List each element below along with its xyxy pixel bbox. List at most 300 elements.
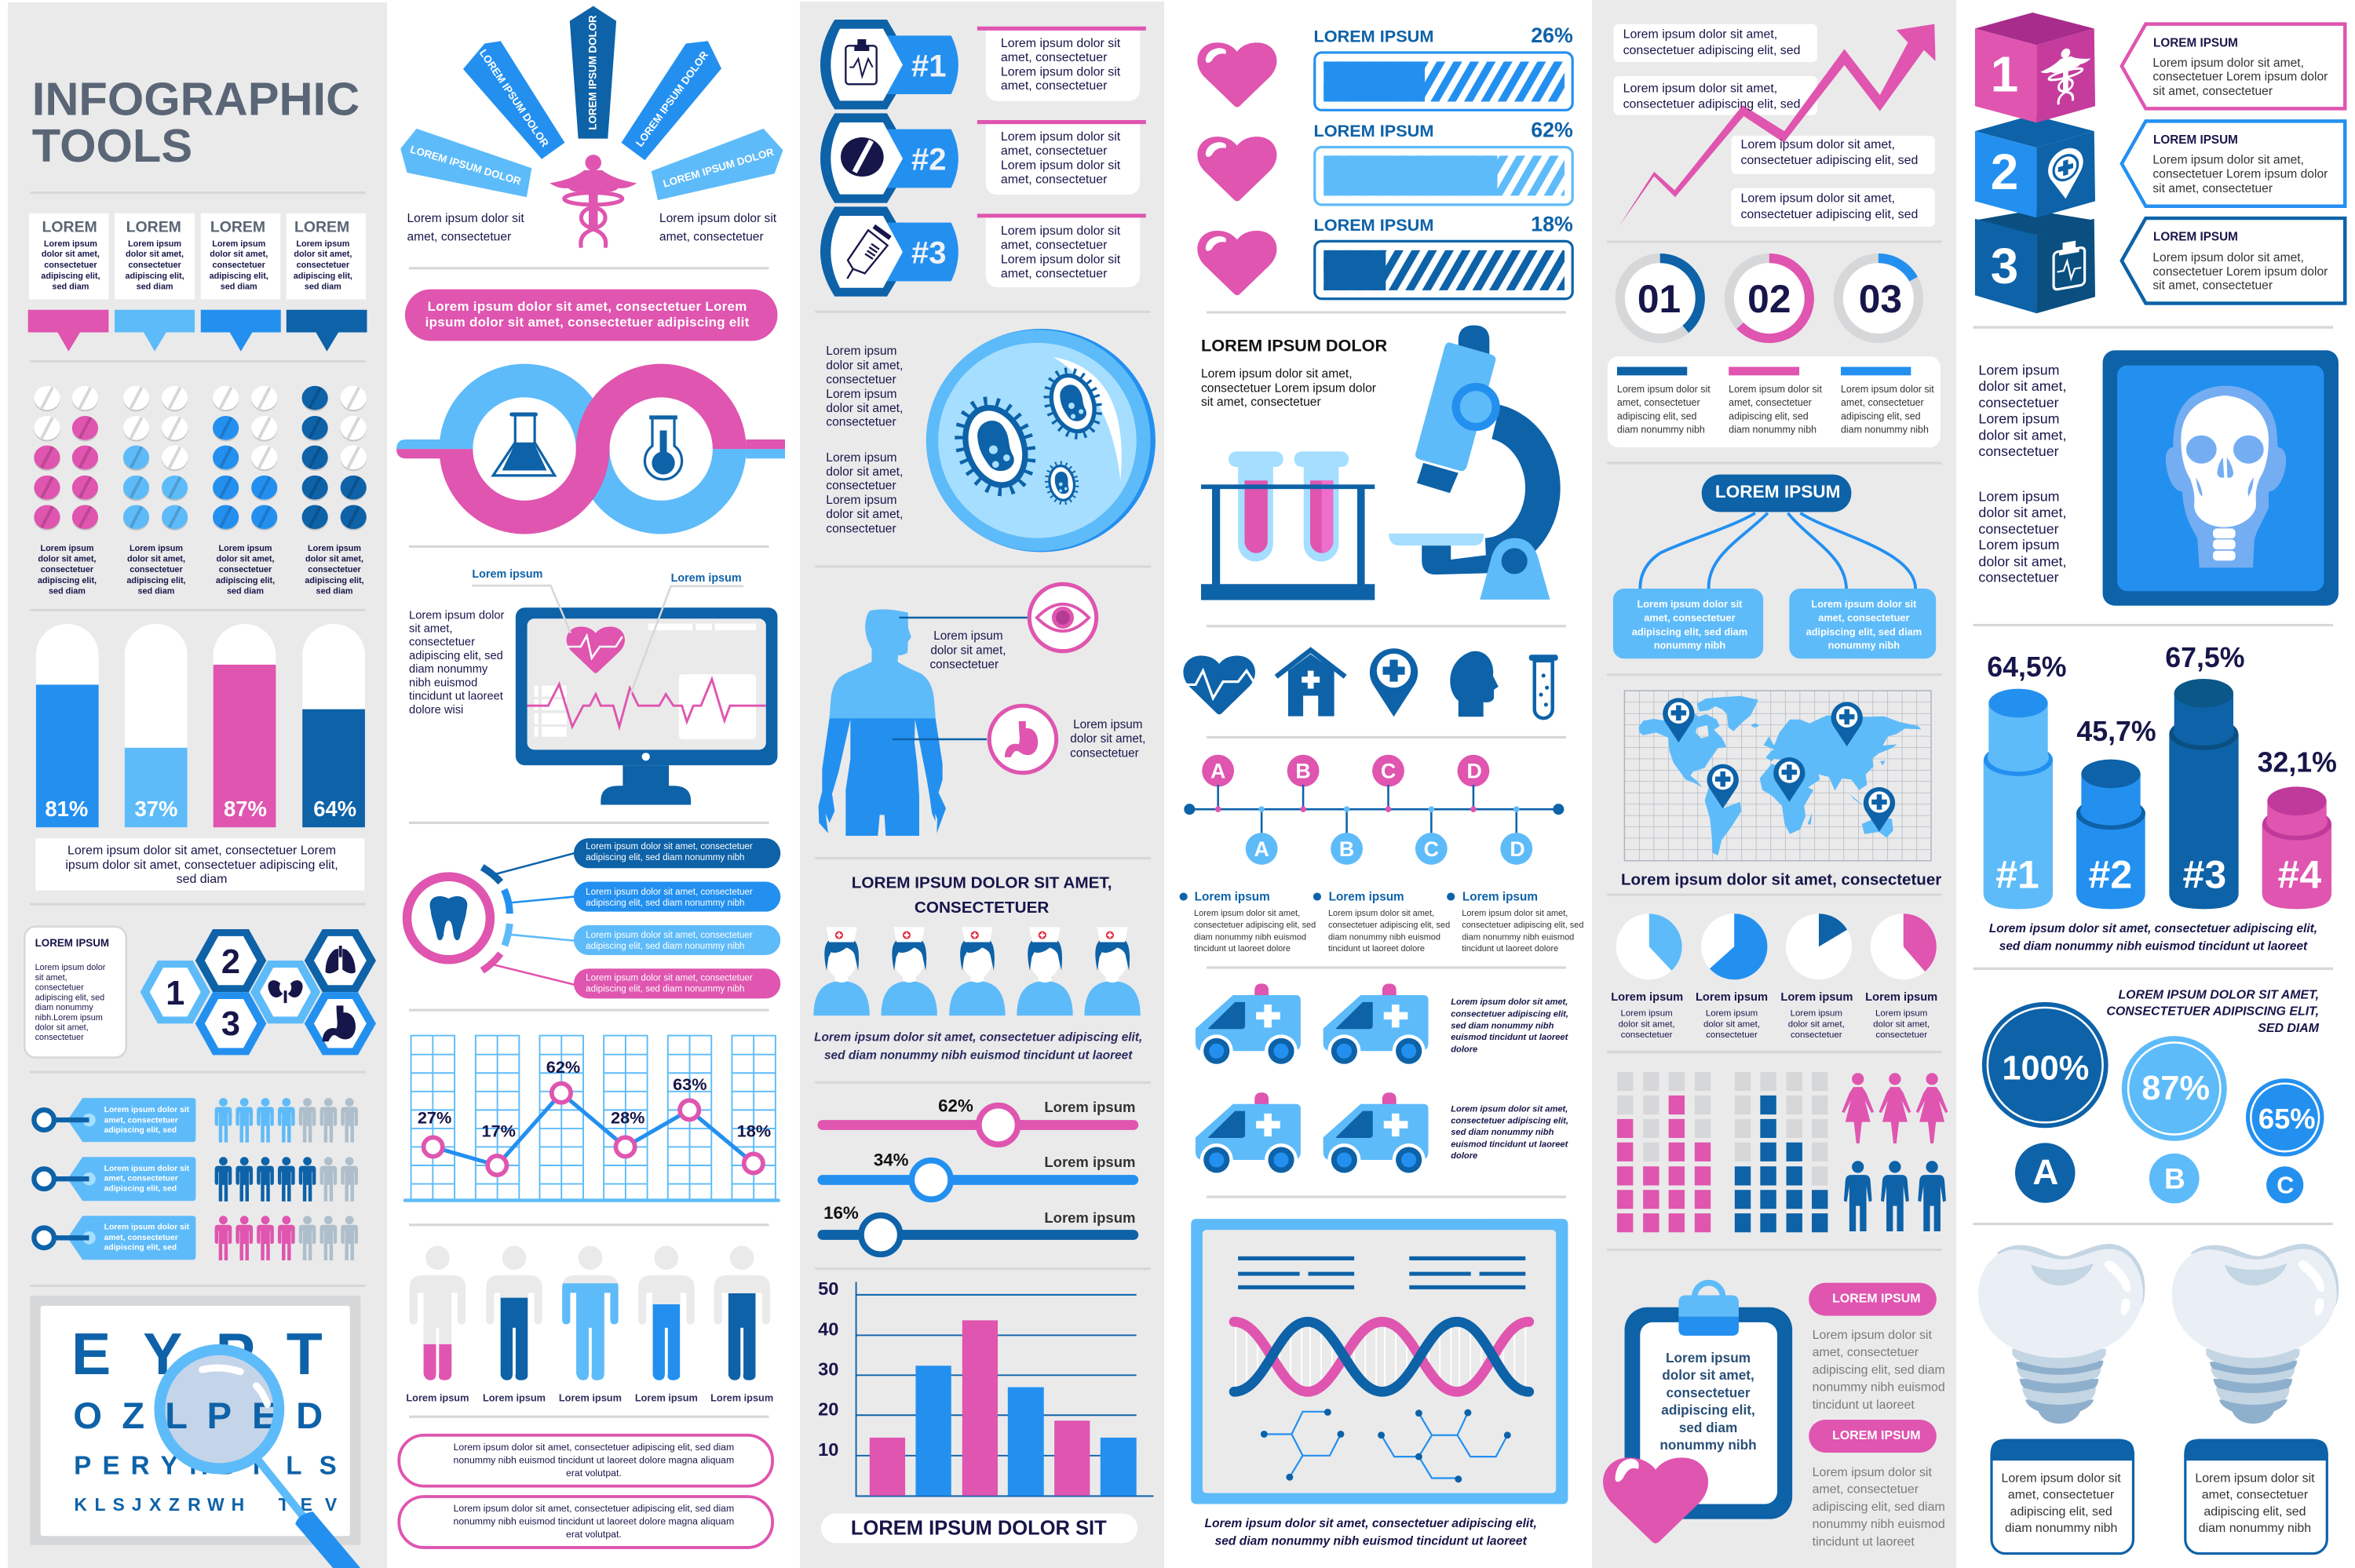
pointed callouts: LOREM IPSUM xyxy=(2153,36,2238,49)
nurses: sed diam nonummy nibh euismod tincidunt ut laoreet xyxy=(824,1048,1133,1062)
four text cards: adipiscing elit, xyxy=(294,272,352,281)
four text cards: consectetuer xyxy=(44,261,97,270)
pointed callouts: Lorem ipsum dolor sit amet, xyxy=(2152,251,2304,264)
ambulances: Lorem ipsum dolor sit amet, xyxy=(1451,997,1568,1007)
cylinders chart: #4 xyxy=(2278,853,2321,897)
dental implants xyxy=(1978,1244,2339,1554)
pill captions: sed diam xyxy=(316,586,353,596)
pink banner: ipsum dolor sit amet, consectetuer adipiscing elit xyxy=(425,315,750,330)
monitor with heart monitor xyxy=(409,568,777,788)
bar chart caption: Lorem ipsum dolor sit amet, consectetuer Lorem xyxy=(68,844,336,858)
eye chart with magnifier: L xyxy=(95,1494,106,1515)
eye chart with magnifier: O xyxy=(73,1395,102,1436)
pill captions: adipiscing elit, xyxy=(38,576,97,585)
icon: clipboard white xyxy=(2054,239,2085,290)
sliders: 34% xyxy=(874,1150,909,1170)
body figures xyxy=(406,1245,773,1403)
pill captions: adipiscing elit, xyxy=(305,576,364,585)
petri dish with bacteria: dolor sit amet, xyxy=(826,465,903,479)
info cards: amet, consectetuer xyxy=(1001,267,1108,280)
progress bars: 26% xyxy=(1531,24,1573,47)
four text cards: adipiscing elit, xyxy=(125,272,184,281)
petri dish with bacteria: consectetuer xyxy=(826,416,896,429)
sliders: Lorem ipsum xyxy=(1044,1099,1135,1115)
rays with caduceus: Lorem ipsum dolor sit xyxy=(659,212,777,225)
timeline axis and lower markers: A xyxy=(1254,837,1269,861)
four text cards: consectetuer xyxy=(297,261,350,270)
info cards: amet, consectetuer xyxy=(1001,79,1108,93)
info cards: Lorem ipsum dolor sit xyxy=(1001,130,1121,144)
chart title: LOREM IPSUM DOLOR SIT xyxy=(851,1517,1107,1539)
petri dish with bacteria: consectetuer xyxy=(826,374,896,387)
monitor with heart monitor: tincidunt ut laoreet xyxy=(409,691,503,703)
monitor with heart monitor: sit amet, xyxy=(409,622,452,635)
pink labels with paragraphs: Lorem ipsum dolor sit xyxy=(1813,1329,1932,1342)
pill captions: adipiscing elit, xyxy=(216,576,275,585)
eye chart with magnifier: V xyxy=(325,1494,338,1515)
pink labels with paragraphs: adipiscing elit, sed diam xyxy=(1813,1363,1945,1377)
rays with caduceus: LOREM IPSUM DOLOR xyxy=(633,49,710,149)
eye chart with magnifier: L xyxy=(165,1395,188,1436)
square pictogram bars xyxy=(1617,1072,1827,1232)
nurses xyxy=(813,874,1142,1062)
arrow chart with text cards: consectetuer adipiscing elit, sed xyxy=(1740,154,1918,167)
test tube rack xyxy=(1201,451,1375,600)
percent circles: SED DIAM xyxy=(2258,1022,2320,1035)
eye chart with magnifier: S xyxy=(112,1494,125,1515)
columns 5-6 upper half xyxy=(1607,13,2345,861)
tags with person rows xyxy=(34,1098,358,1260)
progress bars xyxy=(1313,24,1573,299)
capsule bar chart: 64% xyxy=(313,797,356,821)
timeline upper markers: B xyxy=(1295,760,1311,783)
eye chart with magnifier: I xyxy=(253,1451,260,1480)
text card: lorem ipsum: diam nonummy xyxy=(35,1003,93,1012)
pink labels with paragraphs: LOREM IPSUM xyxy=(1832,1429,1920,1442)
pie charts: dolor sit amet, xyxy=(1619,1020,1675,1030)
human silhouette with organ callouts: dolor sit amet, xyxy=(1070,732,1145,746)
timeline axis and lower markers: B xyxy=(1339,837,1354,861)
ambulances xyxy=(1196,983,1569,1176)
sliders: 62% xyxy=(938,1096,973,1115)
monitor with heart monitor: diam nonummy xyxy=(409,663,488,676)
donut legend card: adipiscing elit, sed xyxy=(1617,410,1697,421)
numbered hex badges: #3 xyxy=(911,236,946,271)
columns 1-2 lower half xyxy=(24,786,780,1568)
eye chart with magnifier: E xyxy=(301,1494,312,1515)
clipboard with heart: adipiscing elit, xyxy=(1661,1402,1755,1418)
pie charts: dolor sit amet, xyxy=(1873,1020,1930,1030)
gray panel column 3 xyxy=(800,2,1164,1568)
tooth callouts: Lorem ipsum dolor sit amet, consectetuer xyxy=(586,974,753,983)
pill captions: dolor sit amet, xyxy=(216,555,275,564)
xray panel: Lorem ipsum xyxy=(1978,363,2060,378)
pill captions: Lorem ipsum xyxy=(40,544,93,553)
lab section heading: Lorem ipsum dolor sit amet, xyxy=(1201,367,1353,381)
infinity loop with flasks xyxy=(396,381,785,517)
xray panel: Lorem ipsum xyxy=(1978,411,2060,427)
four text cards: dolor sit amet, xyxy=(126,250,184,259)
pill captions: dolor sit amet, xyxy=(127,555,185,564)
xray panel: consectetuer xyxy=(1978,570,2059,585)
pie charts: dolor sit amet, xyxy=(1703,1020,1760,1030)
four text cards: LOREM xyxy=(210,218,265,235)
body figures: Lorem ipsum xyxy=(483,1391,546,1403)
outlined pink text pills xyxy=(399,1435,772,1548)
grid line chart: 27% xyxy=(418,1108,451,1128)
icon: conical flask xyxy=(493,413,555,476)
organisation tree: Lorem ipsum dolor sit xyxy=(1637,598,1743,610)
dental implants: amet, consectetuer xyxy=(2008,1489,2115,1502)
progress donuts: 02 xyxy=(1747,277,1791,321)
text card: lorem ipsum: consectetuer xyxy=(35,1033,84,1042)
dental implants: adipiscing elit, sed xyxy=(2203,1505,2306,1519)
pointed callouts xyxy=(2122,24,2345,303)
four text cards: Lorem ipsum xyxy=(212,239,265,249)
timeline axis and lower markers xyxy=(1184,785,1564,865)
four text cards: sed diam xyxy=(52,283,89,292)
petri dish with bacteria: Lorem ipsum xyxy=(826,451,897,465)
ambulances: consectetuer adipiscing elit, xyxy=(1451,1009,1568,1019)
body figures: Lorem ipsum xyxy=(635,1391,698,1403)
timeline text columns: Lorem ipsum xyxy=(1462,891,1538,904)
rays with caduceus: amet, consectetuer xyxy=(659,231,764,244)
pie charts: Lorem ipsum xyxy=(1620,1009,1673,1019)
nurses: LOREM IPSUM DOLOR SIT AMET, xyxy=(852,874,1112,892)
timeline upper markers xyxy=(1202,755,1489,787)
cylinders chart xyxy=(1984,679,2331,909)
bar chart caption: sed diam xyxy=(177,873,227,886)
organisation tree: adipiscing elit, sed diam xyxy=(1632,625,1747,637)
dna panel: sed diam nonummy nibh euismod tincidunt ut laoreet xyxy=(1215,1535,1528,1548)
dental implants: amet, consectetuer xyxy=(2202,1489,2309,1502)
rays with caduceus: amet, consectetuer xyxy=(407,231,511,244)
donut legend card: adipiscing elit, sed xyxy=(1841,410,1921,421)
tooth callouts: adipiscing elit, sed diam nonummy nibh xyxy=(586,985,744,994)
outlined pink text pills: erat volutpat. xyxy=(566,1468,622,1479)
four text cards: dolor sit amet, xyxy=(294,250,352,259)
pink labels with paragraphs: adipiscing elit, sed diam xyxy=(1813,1501,1945,1514)
gray panel column 1 xyxy=(8,2,387,1568)
eye chart with magnifier: P xyxy=(216,1321,255,1387)
info cards: Lorem ipsum dolor sit xyxy=(1001,253,1121,266)
grid line chart: 17% xyxy=(482,1121,516,1141)
numbered hex badges: #2 xyxy=(911,143,946,177)
text card: lorem ipsum xyxy=(24,927,126,1058)
four text cards: Lorem ipsum xyxy=(44,239,97,249)
pill captions: dolor sit amet, xyxy=(305,555,363,564)
body figures: Lorem ipsum xyxy=(559,1391,622,1403)
ambulances: euismod tincidunt ut laoreet xyxy=(1451,1033,1569,1042)
dental implants: diam nonummy nibh xyxy=(2005,1522,2117,1535)
petri dish with bacteria: dolor sit amet, xyxy=(826,402,903,415)
pink labels with paragraphs: amet, consectetuer xyxy=(1813,1346,1919,1359)
pie charts: consectetuer xyxy=(1791,1030,1842,1040)
petri dish with bacteria: Lorem ipsum xyxy=(826,388,897,401)
timeline text columns: diam nonummy nibh euismod xyxy=(1462,932,1574,942)
pill captions: sed diam xyxy=(49,586,86,596)
eye chart with magnifier: E xyxy=(71,1321,111,1387)
monitor with heart monitor: nibh euismod xyxy=(409,676,477,689)
dental implants: Lorem ipsum dolor sit xyxy=(2195,1472,2315,1486)
capsule bar chart xyxy=(36,624,365,827)
organisation tree: adipiscing elit, sed diam xyxy=(1806,625,1922,637)
lab section heading: LOREM IPSUM DOLOR xyxy=(1201,336,1388,356)
isometric cubes xyxy=(1975,13,2095,313)
timeline text columns: tincidunt ut laoreet dolore xyxy=(1462,944,1558,954)
donut legend card: diam nonummy nibh xyxy=(1729,425,1816,436)
cylinder caption: Lorem ipsum dolor sit amet, consectetuer adipiscing elit, xyxy=(1989,922,2317,935)
cylinder value labels xyxy=(1987,642,2337,778)
timeline upper markers: C xyxy=(1381,760,1396,783)
pill captions: sed diam xyxy=(227,586,264,596)
human silhouette with organ callouts: Lorem ipsum xyxy=(933,629,1003,643)
petri dish with bacteria: consectetuer xyxy=(826,523,896,536)
tags with person rows: adipiscing elit, sed xyxy=(104,1184,177,1193)
columns 5-6 lower half xyxy=(1603,870,2339,1554)
tooth callouts: Lorem ipsum dolor sit amet, consectetuer xyxy=(586,888,753,897)
eye chart with magnifier: Y xyxy=(160,1451,178,1480)
four text cards: adipiscing elit, xyxy=(41,272,100,281)
bar chart caption: ipsum dolor sit amet, consectetuer adipiscing elit, xyxy=(65,859,338,872)
grid line chart: 18% xyxy=(737,1121,771,1141)
rays with caduceus: LOREM IPSUM DOLOR xyxy=(587,15,599,130)
pie charts xyxy=(1611,913,1937,1040)
eye chart with magnifier: Z xyxy=(169,1494,180,1515)
eye chart with magnifier: E xyxy=(252,1395,276,1436)
isometric cubes: 3 xyxy=(1991,238,2018,294)
timeline text columns: Lorem ipsum dolor sit amet, xyxy=(1194,909,1300,918)
map caption: Lorem ipsum dolor sit amet, consectetuer xyxy=(1621,870,1941,888)
pie charts: Lorem ipsum xyxy=(1791,1009,1842,1019)
arrow chart with text cards: Lorem ipsum dolor sit amet, xyxy=(1623,82,1777,95)
clipboard with heart xyxy=(1603,1283,1792,1544)
pie charts: consectetuer xyxy=(1706,1030,1758,1040)
pink labels with paragraphs: tincidunt ut laoreet xyxy=(1813,1535,1915,1548)
info cards: amet, consectetuer xyxy=(1001,144,1108,158)
four text cards: dolor sit amet, xyxy=(210,250,268,259)
timeline text columns: consectetuer adipiscing elit, sed xyxy=(1462,921,1583,930)
petri dish with bacteria: Lorem ipsum xyxy=(826,345,897,358)
ambulances: euismod tincidunt ut laoreet xyxy=(1451,1140,1569,1149)
progress donuts xyxy=(1620,258,1919,338)
arrow chart with text cards: Lorem ipsum dolor sit amet, xyxy=(1623,27,1777,41)
pink labels with paragraphs: nonummy nibh euismod xyxy=(1813,1381,1945,1395)
body figures: Lorem ipsum xyxy=(406,1391,469,1403)
eye chart with magnifier: P xyxy=(207,1395,232,1436)
columns 3-4 lower half xyxy=(813,785,1583,1548)
timeline text columns: Lorem ipsum dolor sit amet, xyxy=(1328,909,1434,918)
capsule bar chart: 87% xyxy=(224,797,267,821)
pill captions: consectetuer xyxy=(41,565,94,574)
info cards: amet, consectetuer xyxy=(1001,239,1108,252)
hexagon organs: 2 xyxy=(221,943,240,981)
body figures: Lorem ipsum xyxy=(710,1391,773,1403)
info cards: amet, consectetuer xyxy=(1001,51,1108,64)
rays with caduceus: LOREM IPSUM DOLOR xyxy=(477,47,551,149)
human silhouette with organ callouts: dolor sit amet, xyxy=(930,644,1006,658)
rays with caduceus xyxy=(400,6,783,248)
text card: lorem ipsum: LOREM IPSUM xyxy=(35,937,109,949)
dental implants: diam nonummy nibh xyxy=(2199,1522,2311,1535)
tags with person rows: amet, consectetuer xyxy=(104,1175,178,1183)
eye chart with magnifier: T xyxy=(279,1494,290,1515)
tooth callouts: Lorem ipsum dolor sit amet, consectetuer xyxy=(586,931,753,940)
organisation tree: LOREM IPSUM xyxy=(1715,482,1840,501)
lab section heading: sit amet, consectetuer xyxy=(1201,396,1321,409)
xray panel: dolor sit amet, xyxy=(1978,378,2066,394)
timeline text columns: tincidunt ut laoreet dolore xyxy=(1328,944,1425,954)
four text cards xyxy=(29,213,366,299)
pie charts: Lorem ipsum xyxy=(1696,991,1768,1004)
organisation tree: Lorem ipsum dolor sit xyxy=(1811,598,1917,610)
eye chart with magnifier: D xyxy=(218,1451,237,1480)
cylinder value labels: 64,5% xyxy=(1987,651,2067,683)
progress bars: LOREM IPSUM xyxy=(1313,121,1433,140)
petri dish with bacteria: Lorem ipsum xyxy=(826,494,897,507)
petri dish with bacteria xyxy=(826,329,1156,552)
four text cards: dolor sit amet, xyxy=(42,250,100,259)
outlined pink text pills: Lorem ipsum dolor sit amet, consectetuer adipiscing elit, sed diam xyxy=(454,1503,734,1514)
info cards: Lorem ipsum dolor sit xyxy=(1001,65,1121,78)
pink labels with paragraphs: nonummy nibh euismod xyxy=(1813,1518,1945,1531)
title xyxy=(32,73,360,172)
xray panel: consectetuer xyxy=(1978,521,2059,537)
organisation tree: nonummy nibh xyxy=(1654,640,1725,651)
isometric cubes: 1 xyxy=(1991,46,2018,103)
cylinders chart: #2 xyxy=(2089,853,2132,897)
hexagon organs xyxy=(141,929,376,1055)
pointed callouts: LOREM IPSUM xyxy=(2153,231,2238,244)
pill captions: consectetuer xyxy=(219,565,272,574)
four text cards: LOREM xyxy=(42,218,97,235)
text card: lorem ipsum: consectetuer xyxy=(35,983,84,993)
isometric cubes: 2 xyxy=(1991,144,2018,200)
arrow chart with text cards: consectetuer adipiscing elit, sed xyxy=(1623,98,1801,111)
text card: lorem ipsum: adipiscing elit, sed xyxy=(35,993,104,1002)
xray panel xyxy=(1978,350,2339,606)
tags with person rows: amet, consectetuer xyxy=(104,1116,178,1125)
tooth callouts: adipiscing elit, sed diam nonummy nibh xyxy=(586,853,744,862)
sliders: Lorem ipsum xyxy=(1044,1154,1135,1170)
chart title xyxy=(821,1514,1137,1543)
pie charts: dolor sit amet, xyxy=(1788,1020,1845,1030)
icon: stomach xyxy=(323,1005,356,1041)
percent circles: C xyxy=(2276,1172,2294,1199)
pill captions xyxy=(38,544,364,596)
pie charts: Lorem ipsum xyxy=(1706,1009,1758,1019)
human silhouette with organ callouts: consectetuer xyxy=(1070,746,1139,760)
timeline axis and lower markers: C xyxy=(1424,837,1439,861)
eye chart with magnifier: R xyxy=(131,1451,150,1480)
four text cards: LOREM xyxy=(294,218,349,235)
eye chart with magnifier: P xyxy=(74,1451,91,1480)
capsule bar chart: 37% xyxy=(135,797,177,821)
xray panel: Lorem ipsum xyxy=(1978,488,2060,504)
arrow chart with text cards: Lorem ipsum dolor sit amet, xyxy=(1740,138,1895,151)
tags with person rows: Lorem ipsum dolor sit xyxy=(104,1165,190,1173)
four text cards: sed diam xyxy=(221,283,257,292)
organisation tree: amet, consectetuer xyxy=(1644,611,1736,623)
percent circles: A xyxy=(2032,1151,2058,1192)
dental implants: adipiscing elit, sed xyxy=(2010,1505,2112,1519)
ambulances: dolore xyxy=(1451,1045,1477,1055)
text card: lorem ipsum: sit amet, xyxy=(35,973,68,983)
tags with person rows: amet, consectetuer xyxy=(104,1234,178,1242)
xray panel: dolor sit amet, xyxy=(1978,505,2066,520)
percent circles xyxy=(1982,988,2324,1203)
timeline upper markers: A xyxy=(1210,760,1225,783)
pink labels with paragraphs: tincidunt ut laoreet xyxy=(1813,1398,1915,1412)
arrow chart with text cards: consectetuer adipiscing elit, sed xyxy=(1623,44,1801,57)
dental implants: Lorem ipsum dolor sit xyxy=(2002,1472,2121,1486)
donut legend card: amet, consectetuer xyxy=(1841,397,1924,408)
ambulances: dolore xyxy=(1451,1151,1477,1161)
eye chart with magnifier: E xyxy=(103,1451,120,1480)
tooth callouts: Lorem ipsum dolor sit amet, consectetuer xyxy=(586,842,753,851)
eye chart with magnifier: S xyxy=(319,1451,337,1480)
organisation tree: amet, consectetuer xyxy=(1818,611,1910,623)
outlined pink text pills: nonummy nibh euismod tincidunt ut laoreet dolore magna aliquam xyxy=(454,1516,734,1527)
ambulances: sed diam nonummy nibh xyxy=(1451,1128,1554,1137)
info cards: Lorem ipsum dolor sit xyxy=(1001,224,1121,238)
pointed callouts: sit amet, consectetuer xyxy=(2152,85,2273,98)
monitor with heart monitor: dolore wisi xyxy=(409,704,463,717)
timeline text columns: Lorem ipsum xyxy=(1195,891,1270,904)
cylinder value labels: 32,1% xyxy=(2258,746,2337,778)
pointed callouts: sit amet, consectetuer xyxy=(2152,182,2273,195)
eye chart with magnifier: X xyxy=(149,1494,162,1515)
pill captions: sed diam xyxy=(138,586,174,596)
pointed callouts: Lorem ipsum dolor sit amet, xyxy=(2152,154,2304,167)
lab section heading: consectetuer Lorem ipsum dolor xyxy=(1201,381,1376,395)
donut legend card: Lorem ipsum dolor sit xyxy=(1841,384,1934,395)
text card: lorem ipsum: nibh.Lorem ipsum xyxy=(35,1013,103,1023)
progress bars: LOREM IPSUM xyxy=(1313,215,1433,235)
four text cards: consectetuer xyxy=(128,261,182,270)
eye chart with magnifier: R xyxy=(188,1494,201,1515)
percent circles: LOREM IPSUM DOLOR SIT AMET, xyxy=(2118,988,2319,1001)
icon: clipboard xyxy=(845,39,877,84)
timeline axis and lower markers: D xyxy=(1510,837,1525,861)
pie charts: consectetuer xyxy=(1621,1030,1673,1040)
nurses: CONSECTETUER xyxy=(915,899,1049,917)
bar chart: 30 xyxy=(818,1358,838,1379)
eye chart with magnifier: K xyxy=(74,1494,87,1515)
xray panel: dolor sit amet, xyxy=(1978,553,2066,569)
arrow chart with text cards xyxy=(1613,24,1936,227)
pointed callouts: sit amet, consectetuer xyxy=(2152,279,2273,293)
timeline text columns: tincidunt ut laoreet dolore xyxy=(1194,944,1291,954)
percent circles: 87% xyxy=(2141,1070,2210,1107)
text card: lorem ipsum: Lorem ipsum dolor xyxy=(35,963,106,972)
clipboard with heart: consectetuer xyxy=(1666,1384,1751,1400)
eye chart with magnifier: Y xyxy=(143,1321,182,1387)
xray panel: consectetuer xyxy=(1978,443,2059,459)
icon: location pin white xyxy=(2048,144,2083,203)
eye chart with magnifier: T xyxy=(287,1321,323,1387)
donut legend card xyxy=(1608,356,1941,447)
eye chart with magnifier: Z xyxy=(122,1395,144,1436)
pie charts: consectetuer xyxy=(1875,1030,1927,1040)
donut legend card: adipiscing elit, sed xyxy=(1729,410,1809,421)
progress donuts: 03 xyxy=(1859,277,1902,321)
percent circles: 100% xyxy=(2002,1050,2089,1088)
info cards: Lorem ipsum dolor sit xyxy=(1001,37,1121,50)
eye chart with magnifier: L xyxy=(286,1451,301,1480)
clipboard with heart: dolor sit amet, xyxy=(1662,1367,1754,1383)
columns 1-2 upper half xyxy=(28,6,785,891)
